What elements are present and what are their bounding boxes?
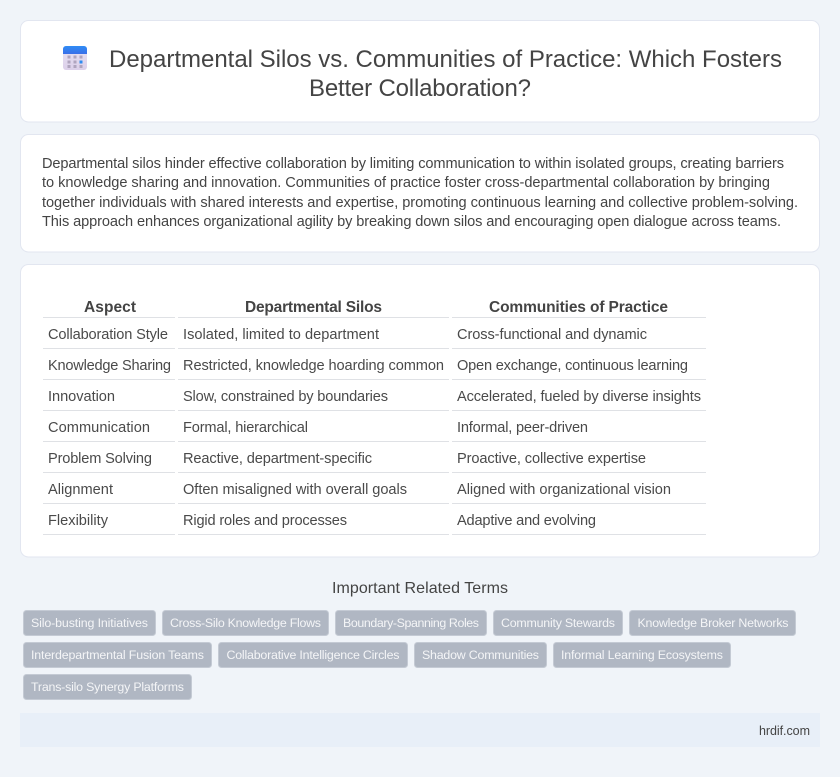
- table header: Aspect: [84, 299, 136, 316]
- tag: [24, 642, 212, 668]
- tag: Community Stewards: [501, 616, 615, 630]
- tag: [494, 610, 622, 636]
- title: [109, 46, 782, 102]
- tag: [630, 610, 796, 636]
- panel: intro paragraph: [20, 134, 820, 252]
- table row: collaboration style: Cross-functional and dynamic: [457, 327, 647, 343]
- table row: collaboration style: Collaboration Style: [48, 327, 168, 343]
- table row: communication: [48, 420, 588, 436]
- table row: problem solving: [48, 451, 646, 467]
- table row: flexibility: [48, 513, 596, 529]
- tag: Knowledge Broker Networks: [638, 616, 788, 630]
- table row: knowledge sharing: Open exchange, continuous learning: [457, 358, 688, 374]
- tag: Boundary-Spanning Roles: [343, 616, 479, 630]
- table row: flexibility: Rigid roles and processes: [183, 513, 347, 529]
- table row: communication: Informal, peer-driven: [457, 420, 588, 436]
- tag: [218, 642, 408, 668]
- text block: paragraph: to knowledge sharing and innovation. Communities of practice foster cross-departmental collaboration by bringing: [42, 175, 770, 191]
- tag: [336, 610, 486, 636]
- table row: flexibility: Adaptive and evolving: [457, 513, 596, 529]
- icon: calendar: [63, 46, 87, 70]
- table row: problem solving: Reactive, department-specific: [183, 451, 372, 467]
- text block: paragraph: Departmental silos hinder effective collaboration by limiting communication to within isolated groups, creating barriers: [42, 156, 784, 172]
- table row: problem solving: Problem Solving: [48, 451, 152, 467]
- table row: innovation: Innovation: [48, 389, 115, 405]
- panel: comparison table: [20, 264, 820, 557]
- table row: innovation: Slow, constrained by boundaries: [183, 389, 388, 405]
- table row: flexibility: Flexibility: [48, 513, 109, 529]
- tag cloud: related terms: [24, 610, 796, 700]
- table row: alignment: Alignment: [48, 482, 113, 498]
- tag: [24, 610, 156, 636]
- tag: [24, 674, 192, 700]
- table row: alignment: Often misaligned with overall goals: [183, 482, 407, 498]
- table row: problem solving: Proactive, collective expertise: [457, 451, 646, 467]
- title: Departmental Silos vs. Communities of Practice: Which Fosters: [109, 46, 782, 73]
- table header: [84, 299, 668, 316]
- tag: [162, 610, 328, 636]
- table row: innovation: Accelerated, fueled by diverse insights: [457, 389, 701, 405]
- tag: [554, 642, 730, 668]
- tag: Shadow Communities: [422, 648, 539, 662]
- tag: Informal Learning Ecosystems: [561, 648, 723, 662]
- table row: communication: Formal, hierarchical: [183, 420, 308, 436]
- text block: paragraph: This approach enhances organizational agility by breaking down silos and encouraging open dialogue across teams.: [42, 214, 781, 230]
- footer: [20, 713, 820, 747]
- heading: related terms: Important Related Terms: [332, 580, 508, 597]
- table row: innovation: [48, 389, 701, 405]
- table row: knowledge sharing: Restricted, knowledge hoarding common: [183, 358, 444, 374]
- text block: paragraph: together individuals with shared interests and expertise, promoting continuous learning and collective problem-solving.: [42, 195, 798, 211]
- table row: communication: Communication: [48, 420, 150, 436]
- table row: alignment: Aligned with organizational vision: [457, 482, 671, 498]
- tag: Silo-busting Initiatives: [31, 616, 148, 630]
- tag: [414, 642, 546, 668]
- table header: Communities of Practice: [489, 299, 668, 316]
- table row: collaboration style: Isolated, limited to department: [183, 327, 379, 343]
- tag: Trans-silo Synergy Platforms: [31, 680, 184, 694]
- footer: hrdif.com: [759, 724, 810, 738]
- table row: collaboration style: [48, 327, 647, 343]
- tag: Collaborative Intelligence Circles: [226, 648, 400, 662]
- panel: title card: [20, 20, 820, 122]
- tag: Cross-Silo Knowledge Flows: [170, 616, 321, 630]
- tag: Interdepartmental Fusion Teams: [31, 648, 204, 662]
- text block: paragraph: [42, 156, 798, 230]
- table row: alignment: [48, 482, 671, 498]
- table header: Departmental Silos: [245, 299, 382, 316]
- table row: knowledge sharing: [48, 358, 688, 374]
- title: Better Collaboration?: [309, 75, 531, 102]
- table row: knowledge sharing: Knowledge Sharing: [48, 358, 171, 374]
